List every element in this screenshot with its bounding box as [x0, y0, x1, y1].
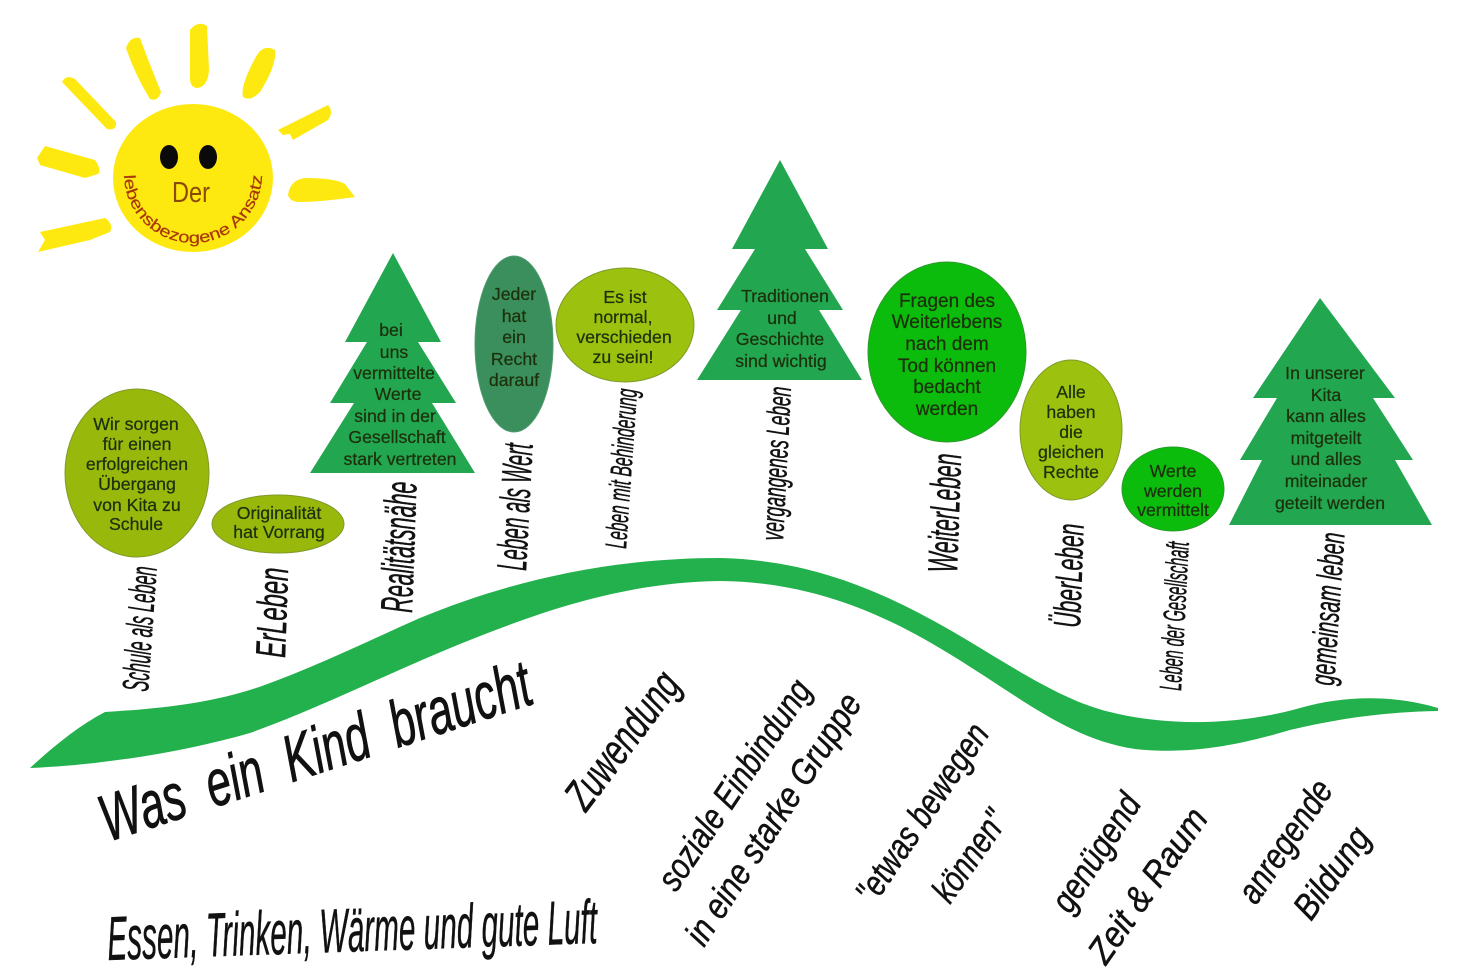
tree: In unserer Kita: geteilt werden — [1275, 493, 1385, 513]
bubble: Wir sorgen: von Kita zu — [93, 495, 181, 515]
bubble: verschieden — [556, 268, 694, 382]
tree: Werte: uns — [380, 342, 408, 362]
bubble: Wir sorgen: für einen — [103, 434, 171, 454]
needs text: Essen, Trinken, Wärme und gute Luft — [106, 888, 600, 974]
label: ÜberLeben: ÜberLeben — [1047, 523, 1093, 628]
tree: In unserer Kita: mitgeteilt — [1291, 428, 1361, 448]
need: etwas bewegen können: können" — [923, 800, 1017, 910]
tree: Traditionen — [697, 160, 862, 380]
vertical labels: Realitätsnähe — [371, 481, 427, 613]
tree: In unserer Kita: Kita — [1311, 385, 1341, 405]
bubble: Weiterleben: Fragen des — [899, 291, 995, 312]
bubble: gleiche Rechte: gleichen — [1038, 442, 1104, 462]
bubble: Originalität: hat Vorrang — [233, 522, 325, 542]
bubble: Recht — [475, 256, 553, 432]
tree: In unserer Kita: und alles — [1291, 449, 1362, 469]
bubble: Werte vermittelt: werden — [1143, 481, 1202, 501]
sun eyes — [160, 145, 217, 169]
bubble: gleiche Rechte: haben — [1046, 402, 1096, 422]
tree: In unserer Kita: miteinader — [1285, 471, 1367, 491]
bubble: Recht: Recht — [491, 349, 537, 369]
vertical labels — [115, 386, 1353, 693]
tree: In unserer Kita: In unserer — [1285, 363, 1365, 383]
sun face — [113, 104, 273, 252]
bubble: Wir sorgen: erfolgreichen — [86, 454, 188, 474]
bubble: Werte vermittelt: vermittelt — [1137, 500, 1209, 520]
bubble: Wir sorgen — [65, 389, 209, 557]
bubble: verschieden: normal, — [594, 307, 652, 327]
need: soziale Einbindung in eine starke Gruppe: soziale Einbindung — [649, 671, 820, 897]
need: soziale Einbindung in eine starke Gruppe: in eine starke Gruppe — [676, 685, 870, 952]
bubble: Weiterleben: Tod können — [898, 356, 996, 377]
bubble: Weiterleben: nach dem — [905, 334, 989, 355]
bubble: verschieden: zu sein! — [593, 347, 653, 367]
need: etwas bewegen können: "etwas bewegen — [847, 715, 997, 910]
bubble: Recht: hat — [502, 306, 526, 326]
bubble: Recht: ein — [502, 327, 526, 347]
bubble: Werte vermittelt: Werte — [1150, 461, 1197, 481]
sun word: Der: Der — [172, 177, 210, 209]
bubble: Wir sorgen: Übergang — [98, 474, 176, 494]
bubble: Originalität: Originalität — [237, 503, 321, 523]
label: gemeinsam leben: gemeinsam leben — [1303, 531, 1353, 687]
sun arc text: lebensbezogene Ansatz — [124, 176, 262, 246]
need: Zuwendung: Zuwendung — [554, 661, 690, 820]
tree: In unserer Kita: kann alles — [1286, 406, 1366, 426]
bubble: Wir sorgen: Wir sorgen — [93, 414, 179, 434]
bubble: Werte vermittelt — [1122, 447, 1224, 531]
hill — [30, 558, 1438, 768]
bubble: verschieden: verschieden — [576, 327, 672, 347]
tree: In unserer Kita — [1229, 298, 1432, 525]
need: genügend Zeit und Raum: genügend — [1042, 785, 1150, 919]
tree: Werte: bei — [379, 320, 403, 340]
tree: Traditionen: sind wichtig — [735, 351, 827, 371]
tree: Werte: sind in der — [354, 406, 436, 426]
tree: Werte: stark vertreten — [343, 449, 457, 469]
tree: Werte — [310, 253, 475, 473]
tree: Traditionen: Traditionen — [741, 286, 829, 306]
bubble: Wir sorgen: Schule — [109, 514, 163, 534]
bubble: Originalität — [212, 495, 344, 553]
need: anregende Bildung — [1229, 771, 1379, 927]
heading: Was ein Kind braucht: Was ein Kind braucht — [89, 645, 542, 855]
bubble: Weiterleben: Weiterlebens — [892, 312, 1002, 333]
vertical labels: Leben der Gesellschaft — [1153, 540, 1196, 691]
label: vergangenes Leben: vergangenes Leben — [754, 386, 798, 541]
icon: sun — [37, 24, 355, 252]
tree: Traditionen: Geschichte — [736, 329, 824, 349]
bubble: gleiche Rechte: Rechte — [1043, 462, 1099, 482]
bubble: gleiche Rechte: die — [1059, 422, 1083, 442]
vertical labels: Schule als Leben — [115, 565, 165, 693]
tree: Werte: Werte — [375, 384, 422, 404]
bubble: Weiterleben: bedacht — [913, 377, 982, 398]
label: ErLeben: ErLeben — [247, 567, 297, 658]
tree: Werte: Gesellschaft — [348, 427, 446, 447]
bubble: Recht: darauf — [489, 370, 539, 390]
tree: Traditionen: und — [767, 308, 797, 328]
needs text — [89, 645, 1379, 974]
label: WeiterLeben: WeiterLeben — [919, 453, 970, 573]
sun rays — [37, 24, 355, 252]
bubble: gleiche Rechte — [1020, 360, 1122, 500]
need: anregende Bildung: Bildung — [1284, 818, 1379, 927]
label: Leben mit Behinderung: Leben mit Behinderung — [600, 387, 644, 549]
bubble: Weiterleben: werden — [915, 399, 978, 420]
bubble: Weiterleben — [868, 262, 1026, 442]
vertical labels: Leben als Wert — [488, 441, 542, 571]
bubble: gleiche Rechte: Alle — [1056, 382, 1086, 402]
need: anregende Bildung: anregende — [1229, 771, 1341, 910]
tree: Werte: vermittelte — [353, 363, 435, 383]
need: genügend Zeit und Raum: Zeit & Raum — [1078, 800, 1216, 971]
bubble: verschieden: Es ist — [603, 287, 647, 307]
bubble: Recht: Jeder — [492, 284, 536, 304]
